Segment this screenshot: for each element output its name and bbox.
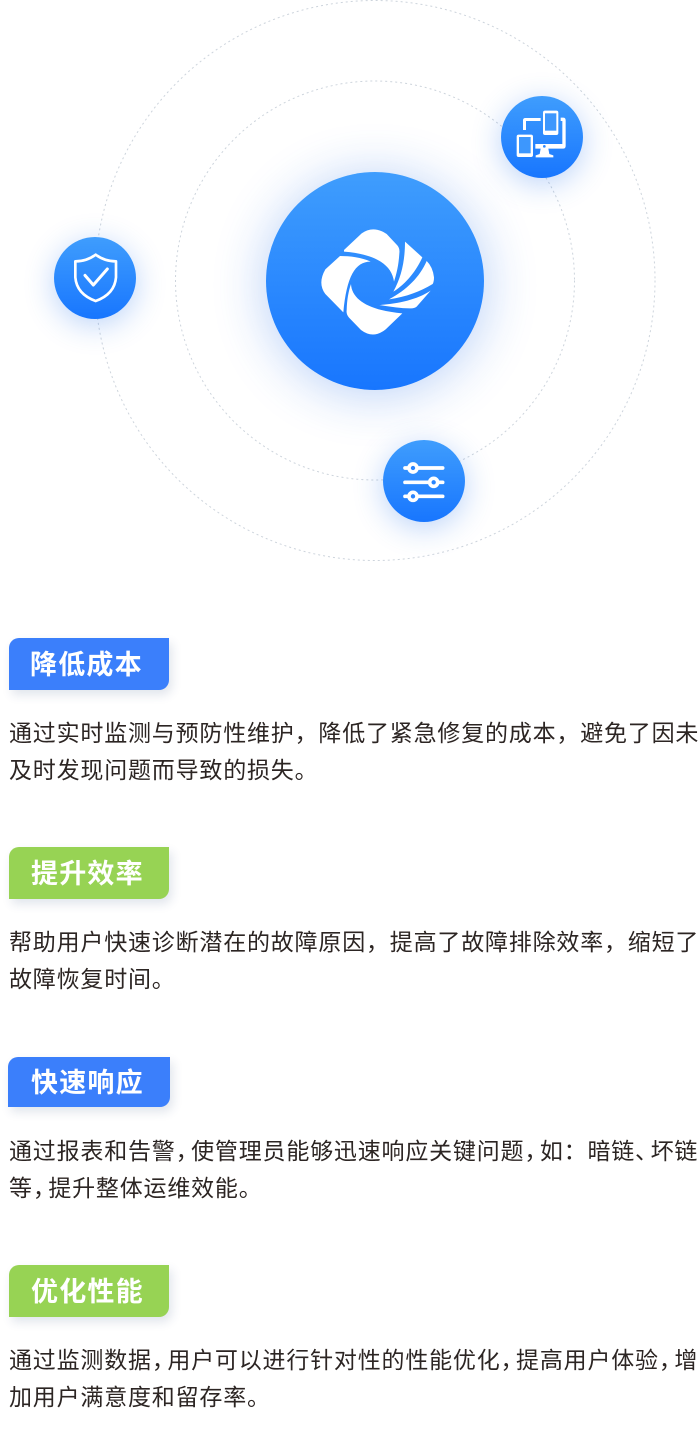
- text: 优化性能 description: 加用户满意度和留存率。: [9, 1384, 271, 1410]
- icon: sliders: [403, 462, 444, 502]
- heading: 提升效率: [9, 847, 169, 899]
- icon: devices: [516, 110, 566, 158]
- central logo circle: [266, 172, 484, 390]
- text: 优化性能 description: [9, 1347, 698, 1410]
- heading: 降低成本: [9, 638, 169, 690]
- orbit rings: [97, 0, 656, 561]
- text: 降低成本 description: 及时发现问题而导致的损失。: [9, 757, 318, 783]
- heading: 提升效率: 提升效率: [31, 859, 144, 889]
- text: 快速响应 description: 通过报表和告警，使管理员能够迅速响应关键问题，如：暗链、坏链: [9, 1138, 698, 1164]
- text: 快速响应 description: 等，提升整体运维效能。: [9, 1175, 263, 1201]
- shield icon circle: [54, 237, 136, 319]
- text: 提升效率 description: 故障恢复时间。: [9, 966, 176, 992]
- heading: 优化性能: 优化性能: [31, 1277, 144, 1307]
- heading: 快速响应: [8, 1057, 170, 1107]
- icon: swirl logo: [321, 229, 434, 334]
- text: 提升效率 description: [9, 929, 699, 992]
- text: 提升效率 description: 帮助用户快速诊断潜在的故障原因，提高了故障排除效率，缩短了: [9, 929, 699, 955]
- icon: shield check: [74, 253, 118, 302]
- text: 优化性能 description: 通过监测数据，用户可以进行针对性的性能优化，提高用户体验，增: [9, 1347, 698, 1373]
- text: 降低成本 description: 通过实时监测与预防性维护，降低了紧急修复的成本，避免了因未: [9, 720, 699, 746]
- sliders icon circle: [382, 440, 464, 522]
- heading: 优化性能: [9, 1265, 169, 1317]
- text: 降低成本 description: [9, 720, 699, 783]
- device icon circle: [500, 96, 582, 178]
- heading: 快速响应: 快速响应: [31, 1068, 144, 1098]
- heading: 降低成本: 降低成本: [30, 650, 143, 680]
- text: 快速响应 description: [9, 1138, 698, 1201]
